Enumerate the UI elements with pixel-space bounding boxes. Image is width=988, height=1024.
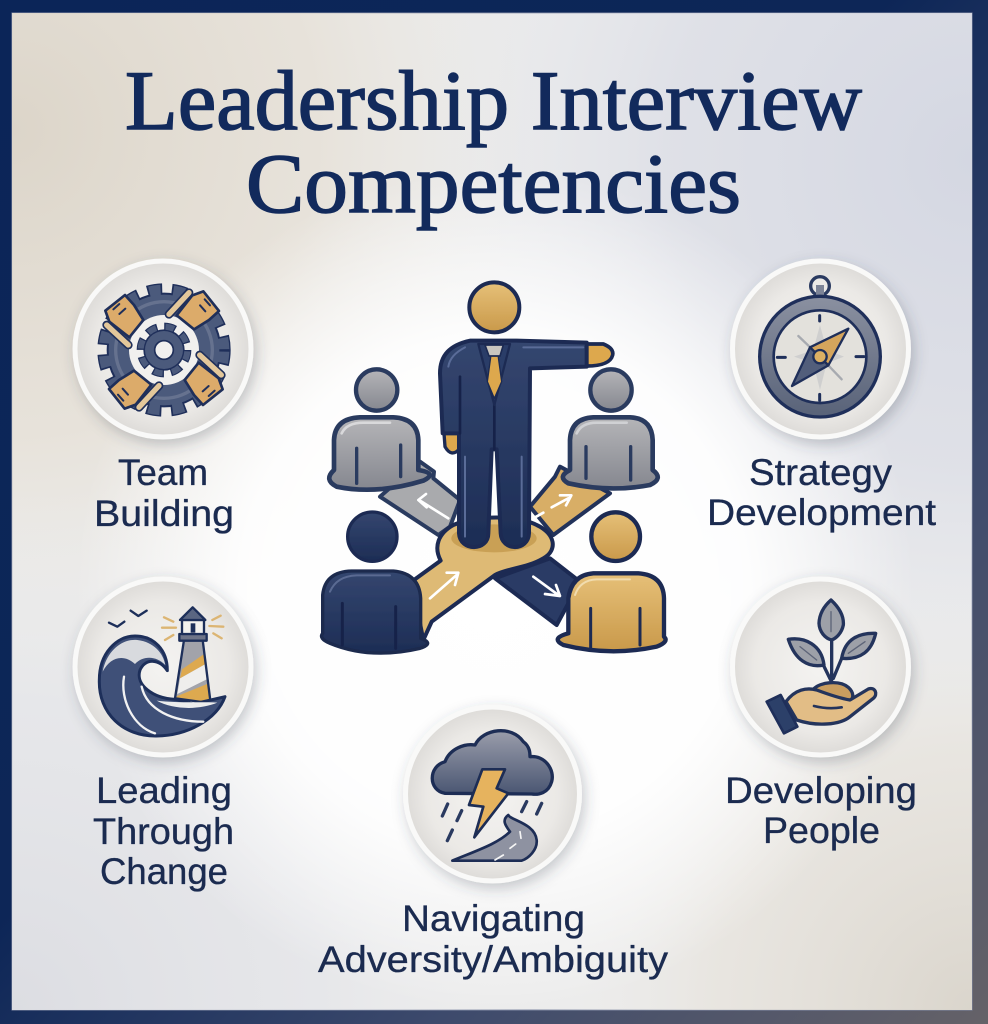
badge: leading through change xyxy=(75,579,251,755)
title xyxy=(125,54,863,231)
icon: gear and clasped hands xyxy=(104,290,224,410)
leader figure xyxy=(440,282,613,547)
label: team building: Team xyxy=(118,452,208,493)
label: team building: Building xyxy=(94,493,234,534)
label: strategy development xyxy=(707,452,937,533)
badge: team building xyxy=(75,261,251,437)
label: leading through change: Change xyxy=(100,851,228,892)
label: navigating adversity/ambiguity: Navigating xyxy=(402,898,585,939)
label: leading through change: Leading xyxy=(96,770,232,811)
central illustration: leader directing four team members xyxy=(321,282,666,653)
connector: top-right gold path xyxy=(530,467,610,535)
label: strategy development: Strategy xyxy=(749,452,893,493)
label: developing people: Developing xyxy=(725,770,917,811)
person: bottom-right gold xyxy=(558,512,666,651)
person: top-left grey xyxy=(329,369,430,490)
label: navigating adversity/ambiguity xyxy=(318,898,669,980)
badge: developing people xyxy=(732,579,908,755)
person: top-right grey xyxy=(563,369,658,488)
direction arrows xyxy=(418,494,571,598)
wave xyxy=(99,636,225,736)
leader head xyxy=(469,282,519,332)
label: leading through change xyxy=(93,770,234,892)
lighthouse xyxy=(175,607,211,703)
label: team building xyxy=(94,452,234,534)
label: leading through change: Through xyxy=(93,811,234,852)
icon: hand holding seedling xyxy=(767,600,876,733)
badge: navigating adversity xyxy=(406,707,580,881)
person: bottom-left navy xyxy=(321,512,428,653)
label: navigating adversity/ambiguity: Adversity/Ambiguity xyxy=(318,939,669,980)
label: developing people xyxy=(725,770,917,851)
needle xyxy=(810,329,848,365)
pointing hand xyxy=(585,344,613,366)
badge: strategy development xyxy=(732,261,908,437)
icon: wave and lighthouse xyxy=(99,607,225,736)
light rays xyxy=(162,616,223,640)
central hub with bottom-left gold path xyxy=(412,517,553,640)
connector: bottom-right navy path xyxy=(495,558,580,625)
tick marks xyxy=(777,316,864,400)
title: Leadership Interview xyxy=(125,54,863,148)
icon: compass xyxy=(758,277,882,419)
icon: storm cloud, lightning and winding road xyxy=(432,731,552,861)
clasped hands xyxy=(105,291,223,409)
shirt collar and tie xyxy=(478,344,510,405)
compass rose xyxy=(794,325,844,390)
title: Competencies xyxy=(246,137,741,231)
birds xyxy=(109,611,147,627)
suit xyxy=(440,341,587,547)
label: developing people: People xyxy=(763,810,880,851)
connector: top-left grey path xyxy=(380,462,460,535)
left hand xyxy=(444,433,460,453)
label: strategy development: Development xyxy=(707,492,937,533)
